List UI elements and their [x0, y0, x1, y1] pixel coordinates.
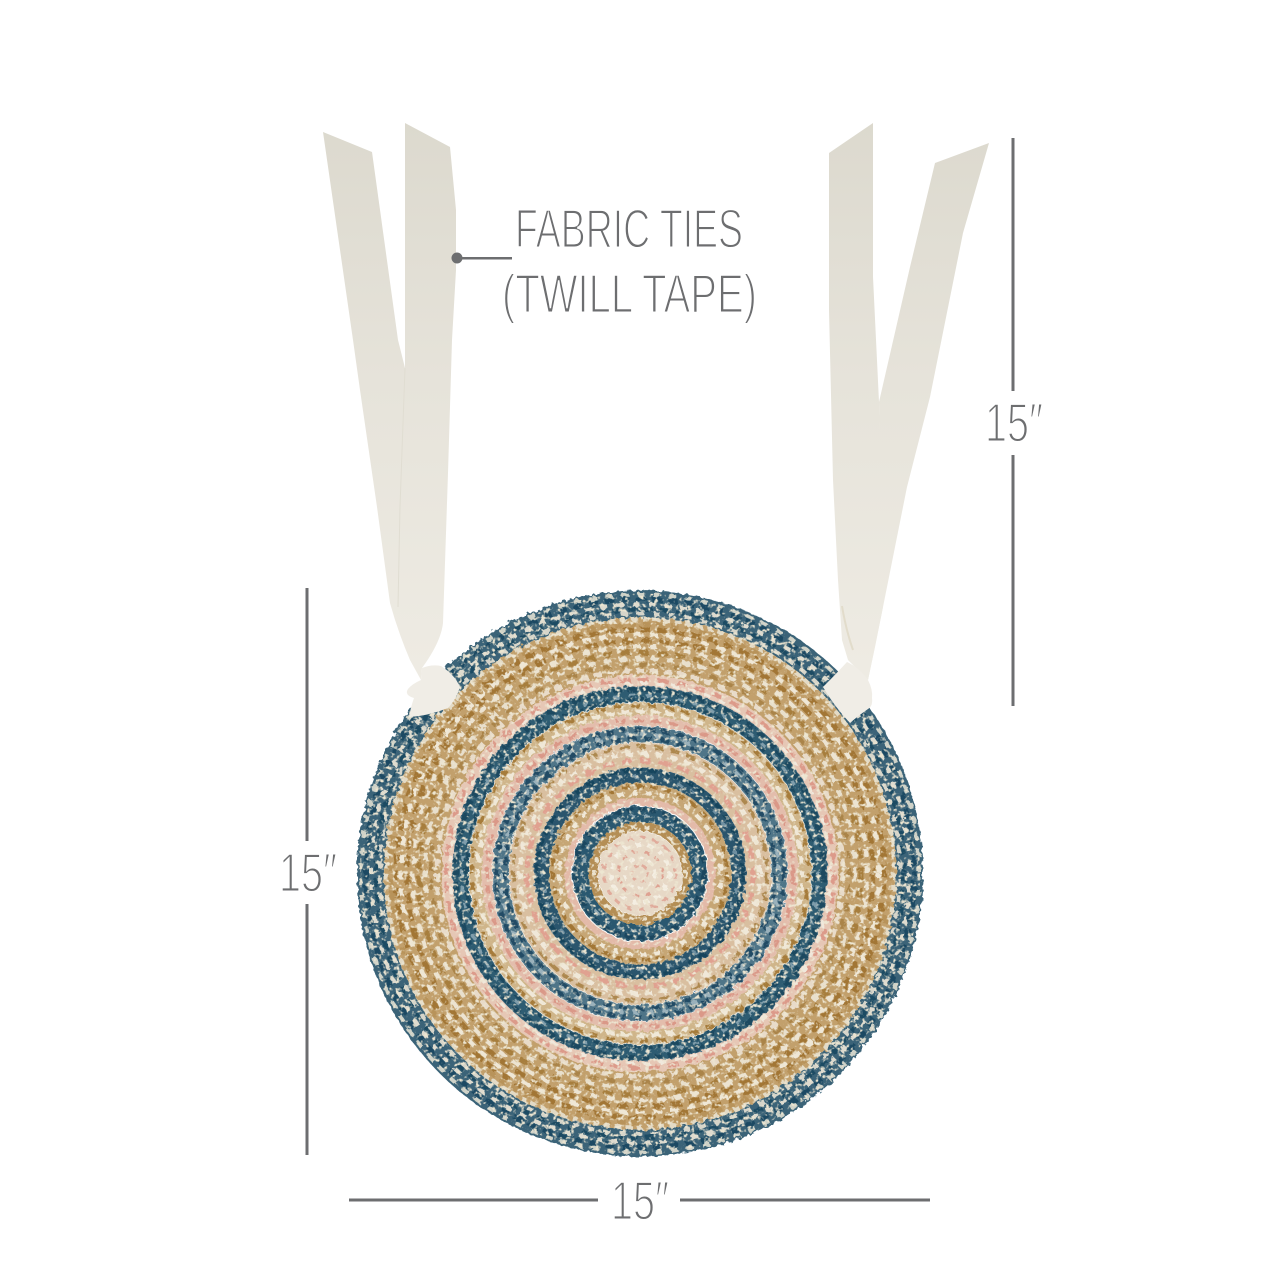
left tie, outer strip [323, 132, 421, 680]
callout: pointer dot and line [452, 252, 512, 264]
ring: pink strand [446, 680, 834, 1068]
ring: fourth teal braid [537, 770, 743, 976]
ring: pink strand [487, 720, 793, 1026]
callout label: fabric ties: (TWILL TAPE) [502, 262, 757, 324]
callout label: fabric ties [502, 198, 757, 324]
braided round mat [361, 594, 919, 1152]
left knot [407, 665, 460, 717]
ring: wide tan braid [386, 620, 894, 1128]
right tie, angled strip [860, 143, 989, 680]
ring: second teal braid [456, 690, 824, 1058]
ring: tan strand [553, 786, 727, 960]
ring: pink strand [568, 802, 712, 946]
ring: outer teal braid [361, 594, 919, 1152]
left tie, inner strip [398, 123, 456, 680]
right tie, back strip [829, 123, 883, 680]
mat centre [598, 832, 682, 916]
dimension: mat height 15 inches: 15″ [279, 842, 337, 904]
ring: inner teal braid [576, 810, 704, 938]
right fabric ties [823, 123, 989, 723]
dimension: tie length 15 inches: 15″ [985, 392, 1043, 454]
dimension: tie length 15 inches [985, 138, 1043, 706]
ring: tan strand [472, 706, 808, 1042]
dimension: mat height 15 inches [279, 588, 337, 1155]
left fabric ties [323, 123, 460, 717]
ring: inner tan strand [593, 826, 687, 920]
right knot [823, 662, 872, 723]
callout label: fabric ties: FABRIC TIES [515, 198, 743, 260]
mat yarn mottling [360, 594, 920, 1154]
ring: tan and pink braid [513, 746, 767, 1000]
dimension: mat width 15 inches [349, 1170, 930, 1232]
dimension: mat width 15 inches: 15″ [611, 1170, 669, 1232]
right tie fold shadow [842, 606, 853, 650]
ring: third teal braid [496, 730, 784, 1018]
left tie seam [398, 368, 405, 607]
